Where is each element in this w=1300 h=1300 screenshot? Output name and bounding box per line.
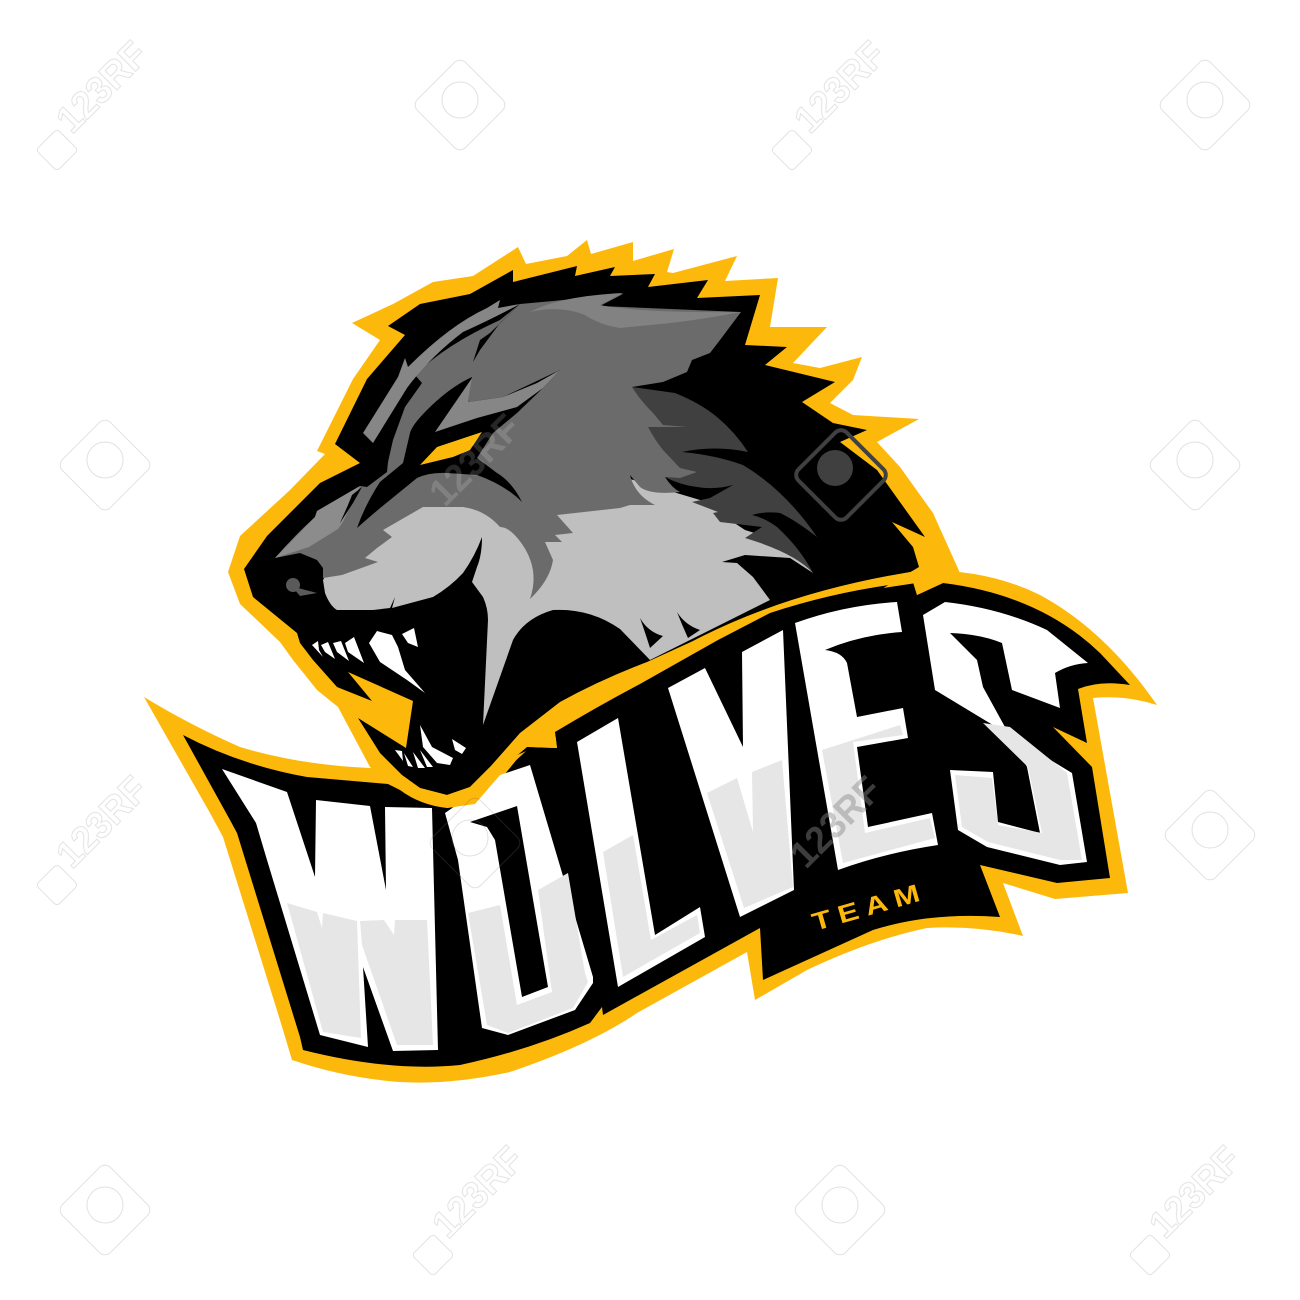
banner — [144, 570, 1157, 1083]
123RF wordmarks: 123RF — [425, 1139, 532, 1246]
123RF wordmarks: 123RF — [49, 769, 156, 876]
nostril — [286, 578, 317, 596]
stamp on head — [793, 427, 889, 523]
forehead stripe — [363, 300, 520, 443]
muzzle highlight — [275, 486, 360, 558]
team label: TEAM — [809, 877, 930, 937]
upper teeth — [312, 628, 425, 693]
mid grey forehead and ear — [275, 294, 741, 599]
lower teeth — [395, 725, 466, 768]
letter W — [222, 769, 438, 1051]
letter S — [923, 602, 1088, 865]
eye — [420, 432, 482, 465]
letter V — [668, 630, 794, 917]
letter L — [577, 718, 705, 987]
banner outer yellow outline — [144, 570, 1157, 1083]
123RF wordmarks: 123RF — [49, 34, 156, 141]
light grey muzzle and neck — [323, 470, 813, 725]
brow black stroke — [473, 304, 520, 362]
crown highlight — [530, 293, 741, 328]
snout crease — [340, 487, 362, 523]
head yellow outline — [228, 240, 960, 808]
123RF wordmarks: 123RF — [787, 34, 894, 141]
123RF wordmarks: 123RF — [1142, 1139, 1249, 1246]
head black fill — [244, 266, 925, 795]
123RF wordmarks: 123RF — [783, 769, 890, 876]
neck fur black wedges — [640, 612, 700, 648]
eye black mask — [357, 370, 560, 528]
dark grey neck fur — [632, 387, 817, 573]
letter O — [445, 765, 593, 1035]
123RF wordmarks: 123RF — [422, 407, 529, 514]
banner black field — [183, 582, 1130, 1067]
yellow band over head — [388, 570, 960, 808]
wolf head — [228, 240, 960, 808]
brow highlight — [435, 370, 560, 432]
letter E — [795, 602, 938, 870]
